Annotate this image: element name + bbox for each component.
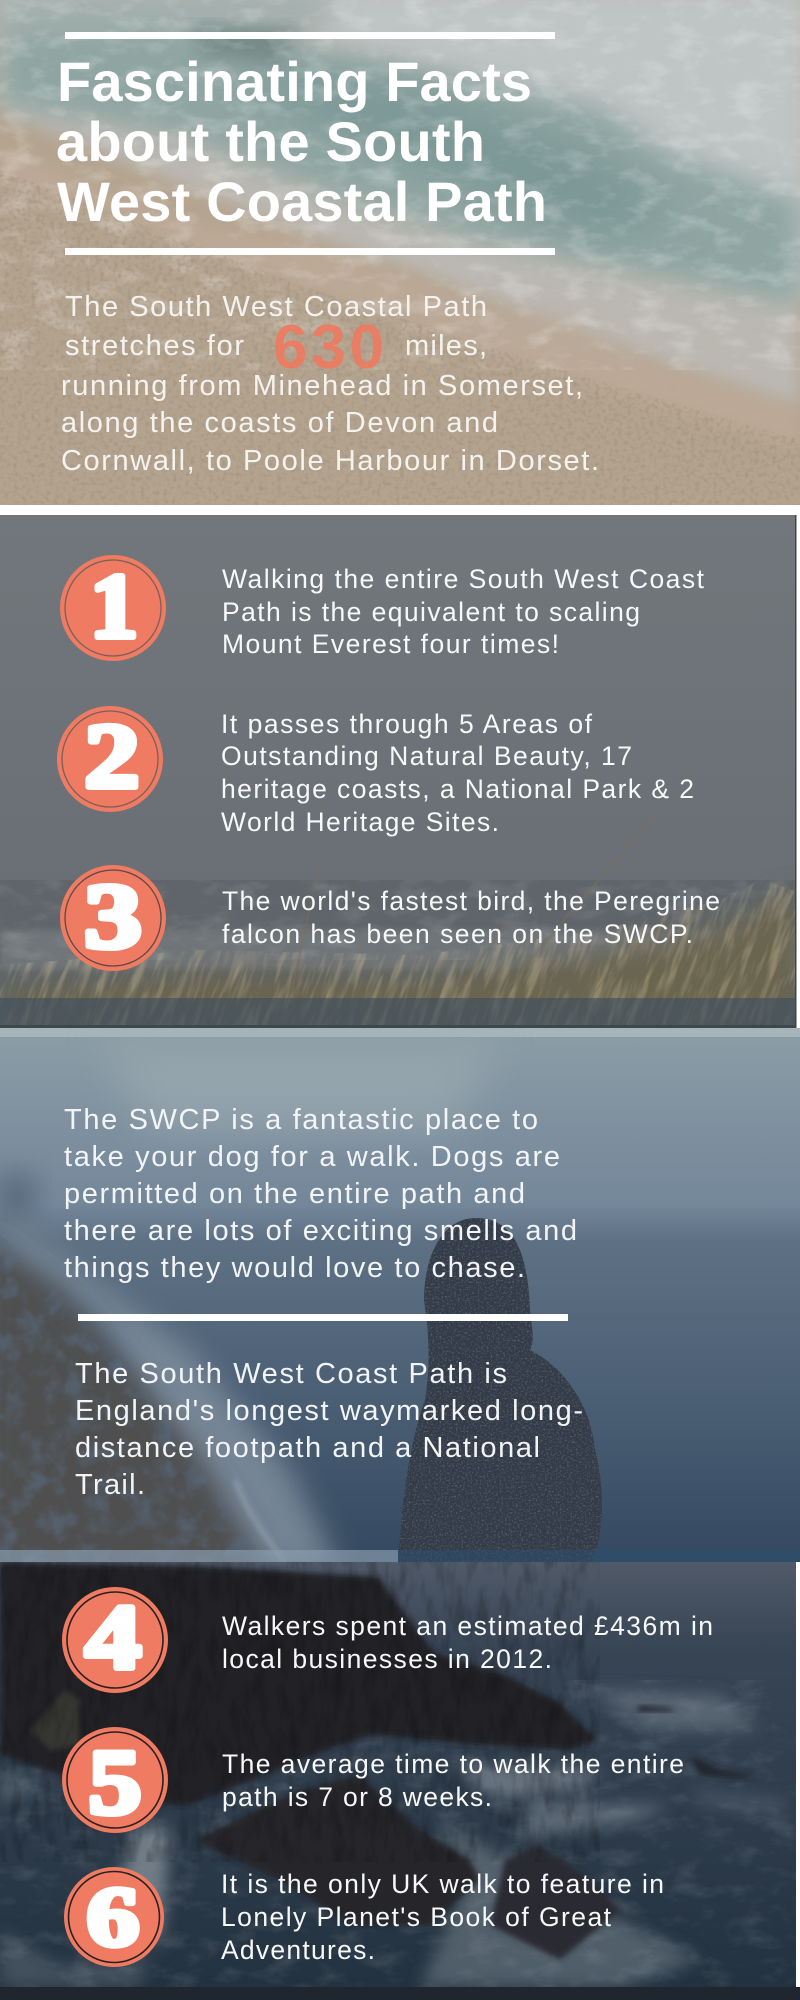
national trail text: The South West Coast Path is	[75, 1358, 507, 1390]
dogs text: The SWCP is a fantastic place to	[64, 1104, 538, 1136]
heading	[56, 50, 547, 233]
fact 4	[62, 1587, 713, 1693]
fact 6 text: Lonely Planet's Book of Great	[221, 1902, 612, 1932]
panel: dogs and national trail on hooded walker photo	[0, 1028, 800, 1580]
fact 4 text	[222, 1611, 713, 1674]
fact 6	[64, 1867, 664, 1967]
fact 1 text: Walking the entire South West Coast	[222, 564, 705, 594]
dogs text: take your dog for a walk. Dogs are	[64, 1141, 560, 1173]
national trail text: England's longest waymarked long-	[75, 1395, 583, 1427]
fact 4 text: Walkers spent an estimated £436m in	[222, 1611, 713, 1641]
icon: number 1 badge: 1	[90, 556, 138, 657]
dogs text: permitted on the entire path and	[64, 1178, 525, 1210]
photo: cliffs and stormy sea	[0, 1987, 800, 2000]
fact 3 text: falcon has been seen on the SWCP.	[222, 919, 693, 949]
icon: number 6 badge	[64, 1867, 164, 1967]
divider rule	[78, 1314, 568, 1321]
intro text: Cornwall, to Poole Harbour in Dorset.	[61, 445, 599, 477]
fact 1	[60, 555, 705, 661]
icon: number 6 badge: 6	[87, 1870, 139, 1964]
fact 6 text	[221, 1869, 664, 1965]
dogs text: things they would love to chase.	[64, 1252, 525, 1284]
intro text: The South West Coastal Path	[65, 291, 487, 323]
dogs text: there are lots of exciting smells and	[64, 1215, 577, 1247]
fact 4 text: local businesses in 2012.	[222, 1644, 552, 1674]
fact 2 text: World Heritage Sites.	[221, 807, 499, 837]
fact 5 text: The average time to walk the entire	[222, 1749, 684, 1779]
national trail text	[75, 1358, 583, 1501]
top rule	[65, 32, 555, 39]
panel: intro header on beach photo	[0, 0, 800, 505]
fact 1 text: Mount Everest four times!	[222, 629, 559, 659]
intro text: miles,	[405, 330, 487, 362]
fact 5 text: path is 7 or 8 weeks.	[222, 1782, 492, 1812]
icon: number 4 badge: 4	[85, 1587, 141, 1689]
photo: hooded figure on misty beach	[0, 1028, 800, 1580]
fact 3 text: The world's fastest bird, the Peregrine	[222, 886, 720, 916]
icon: number 4 badge	[62, 1587, 168, 1693]
fact 2 text: Outstanding Natural Beauty, 17	[221, 741, 632, 771]
fact 2 text: It passes through 5 Areas of	[221, 709, 593, 739]
fact 6 text: It is the only UK walk to feature in	[221, 1869, 664, 1899]
intro text: running from Minehead in Somerset,	[61, 370, 583, 402]
fact 2 text	[221, 709, 694, 837]
big number: 630 miles: 630	[273, 313, 384, 382]
heading: West Coastal Path	[57, 170, 547, 233]
heading: about the South	[56, 110, 485, 173]
fact 6 text: Adventures.	[221, 1935, 375, 1965]
fact 3	[60, 865, 720, 971]
edge line	[795, 515, 796, 1028]
photo: sea and dune grass	[0, 515, 795, 1028]
fact 3 text	[222, 886, 720, 949]
icon: number 2 badge	[57, 705, 163, 812]
icon: number 5 badge	[62, 1727, 168, 1833]
national trail text: Trail.	[75, 1469, 145, 1501]
heading: Fascinating Facts	[57, 50, 532, 113]
panel: facts 4 to 6 on rocky cliff photo	[0, 1562, 800, 2000]
fact 2	[57, 705, 694, 837]
dogs text	[64, 1104, 577, 1284]
fact 5 text	[222, 1749, 684, 1812]
photo: aerial beach and waves	[0, 0, 800, 505]
icon: number 5 badge: 5	[89, 1732, 141, 1833]
figure	[398, 1218, 602, 1570]
intro text: stretches for	[65, 330, 244, 362]
intro text: along the coasts of Devon and	[61, 407, 498, 439]
fact 1 text	[222, 564, 705, 659]
fact 2 text: heritage coasts, a National Park & 2	[221, 774, 694, 804]
icon: number 1 badge	[60, 555, 166, 661]
national trail text: distance footpath and a National	[75, 1432, 540, 1464]
panel: facts 1 to 3 on grassy dune photo	[0, 515, 796, 1028]
icon: number 3 badge: 3	[84, 865, 142, 967]
icon: number 2 badge: 2	[84, 705, 140, 807]
intro text	[61, 291, 599, 477]
icon: number 3 badge	[60, 865, 166, 971]
fact 1 text: Path is the equivalent to scaling	[222, 597, 640, 627]
bottom rule	[65, 248, 555, 255]
fact 5	[62, 1727, 684, 1833]
